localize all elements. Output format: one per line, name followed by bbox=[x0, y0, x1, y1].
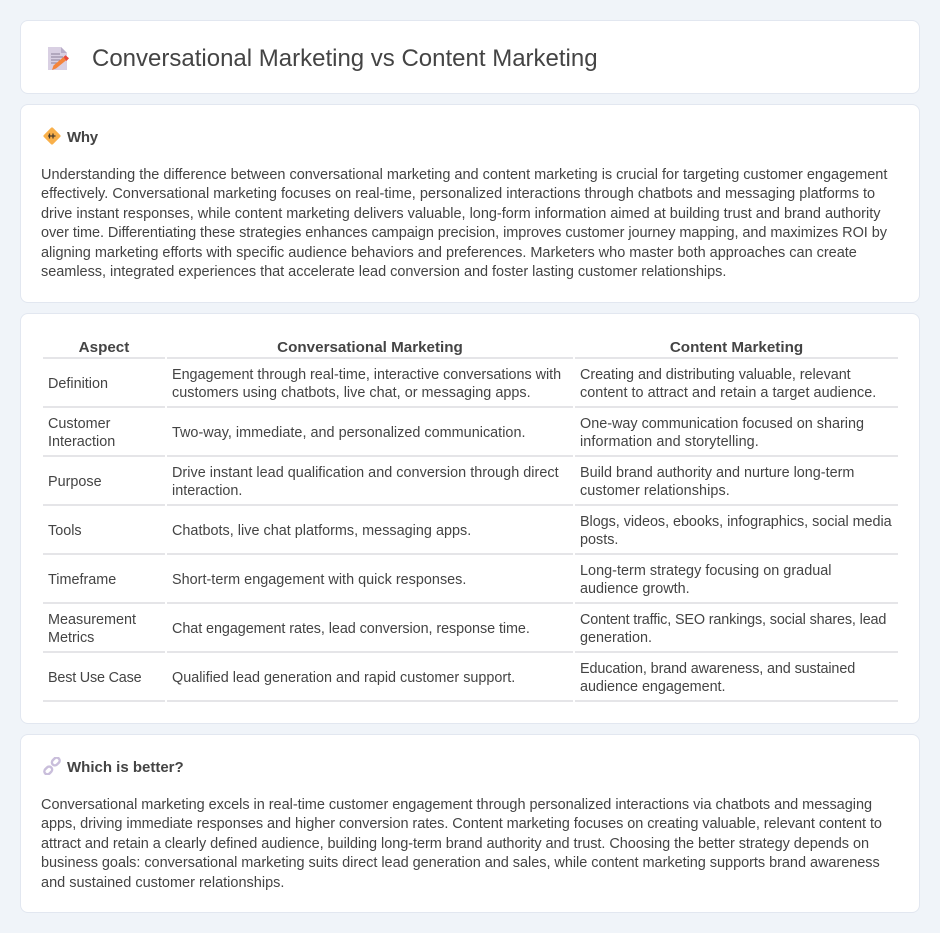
table header: Content Marketing bbox=[670, 339, 803, 356]
row: customer interaction: One-way communication focused on sharing bbox=[580, 416, 864, 432]
icon: diamond sign bbox=[43, 127, 61, 145]
panel: which is better bbox=[20, 734, 920, 913]
row: measurement metrics: Metrics bbox=[48, 630, 94, 646]
row: purpose: Purpose bbox=[48, 474, 102, 490]
row: definition: customers using chatbots, live chat, or messaging apps. bbox=[172, 385, 531, 401]
table header: Conversational Marketing bbox=[277, 339, 463, 356]
row: customer interaction: information and storytelling. bbox=[580, 434, 759, 450]
row: measurement metrics: Chat engagement rates, lead conversion, response time. bbox=[172, 621, 530, 637]
row: tools: posts. bbox=[580, 532, 618, 548]
row: purpose: customer relationships. bbox=[580, 483, 730, 499]
row: measurement metrics: Measurement bbox=[48, 612, 136, 628]
table header: Aspect bbox=[79, 339, 129, 356]
row: timeframe: audience growth. bbox=[580, 581, 690, 597]
row: customer interaction: Two-way, immediate, and personalized communication. bbox=[172, 425, 525, 441]
row: timeframe: Long-term strategy focusing on gradual bbox=[580, 563, 832, 579]
row: tools bbox=[43, 514, 898, 555]
row: customer interaction: Customer bbox=[48, 416, 110, 432]
heading: which is better: Which is better? bbox=[67, 759, 184, 776]
row: timeframe bbox=[43, 563, 898, 604]
panel: header bbox=[20, 20, 920, 94]
table header bbox=[43, 339, 898, 359]
row: customer interaction: Interaction bbox=[48, 434, 115, 450]
text block: which is better: and sustained customer relationships. bbox=[41, 875, 284, 891]
row: timeframe: Short-term engagement with quick responses. bbox=[172, 572, 466, 588]
heading: why: Why bbox=[67, 129, 98, 146]
row: customer interaction bbox=[43, 416, 898, 457]
row: best use case: audience engagement. bbox=[580, 679, 725, 695]
row: definition: Engagement through real-time, interactive conversations with bbox=[172, 367, 561, 383]
text block: why: over time. Differentiating these strategies enhances campaign precision, improves customer journey mapping, and maximizes ROI by bbox=[41, 225, 887, 241]
row: definition: content to attract and retain a target audience. bbox=[580, 385, 876, 401]
row: tools: Blogs, videos, ebooks, infographics, social media bbox=[580, 514, 892, 530]
row: measurement metrics bbox=[43, 612, 898, 653]
icon: document with pencil bbox=[48, 47, 69, 70]
row: tools: Chatbots, live chat platforms, messaging apps. bbox=[172, 523, 471, 539]
row: tools: Tools bbox=[48, 523, 82, 539]
text block: why: effectively. Conversational marketing focuses on real-time, personalized interactions through chatbots and messaging platforms to bbox=[41, 186, 875, 202]
icon: chain link bbox=[43, 757, 61, 775]
row: best use case: Education, brand awareness, and sustained bbox=[580, 661, 855, 677]
row: purpose: Build brand authority and nurture long-term bbox=[580, 465, 854, 481]
row: timeframe: Timeframe bbox=[48, 572, 116, 588]
row: measurement metrics: Content traffic, SEO rankings, social shares, lead bbox=[580, 612, 886, 628]
row: best use case: Qualified lead generation and rapid customer support. bbox=[172, 670, 515, 686]
row: best use case bbox=[43, 661, 898, 702]
row: purpose bbox=[43, 465, 898, 506]
row: definition: Definition bbox=[48, 376, 108, 392]
row: measurement metrics: generation. bbox=[580, 630, 652, 646]
text block: why: aligning marketing efforts with specific audience behaviors and preferences. Marketers who master both approaches can create bbox=[41, 245, 857, 261]
row: definition: Creating and distributing valuable, relevant bbox=[580, 367, 851, 383]
text block: which is better: Conversational marketing excels in real-time customer engagement through personalized interactions via chatbots and messaging bbox=[41, 797, 872, 813]
text block: why: seamless, integrated experiences that accelerate lead conversion and foster lasting customer relationships. bbox=[41, 264, 726, 280]
text block: which is better: apps, driving immediate responses and higher conversion rates. Content marketing focuses on creating valuable, relevant content to bbox=[41, 816, 882, 832]
text block: why: Understanding the difference between conversational marketing and content marketing is crucial for targeting customer engagement bbox=[41, 167, 887, 183]
row: best use case: Best Use Case bbox=[48, 670, 141, 686]
row: purpose: Drive instant lead qualification and conversion through direct bbox=[172, 465, 559, 481]
row: purpose: interaction. bbox=[172, 483, 242, 499]
panel: comparison table bbox=[20, 313, 920, 724]
text block: which is better: attract and retain a clearly defined audience, building long-term brand authority and trust. Choosing the better strategy depends on bbox=[41, 836, 869, 852]
title: Conversational Marketing vs Content Marketing bbox=[92, 45, 598, 72]
text block: why: drive instant responses, while content marketing delivers valuable, long-form information aimed at building trust and brand authority bbox=[41, 206, 880, 222]
text block: which is better: business goals: conversational marketing suits direct lead generation and sales, while content marketing supports brand awareness bbox=[41, 855, 880, 871]
panel: why bbox=[20, 104, 920, 303]
row: definition bbox=[43, 367, 898, 408]
